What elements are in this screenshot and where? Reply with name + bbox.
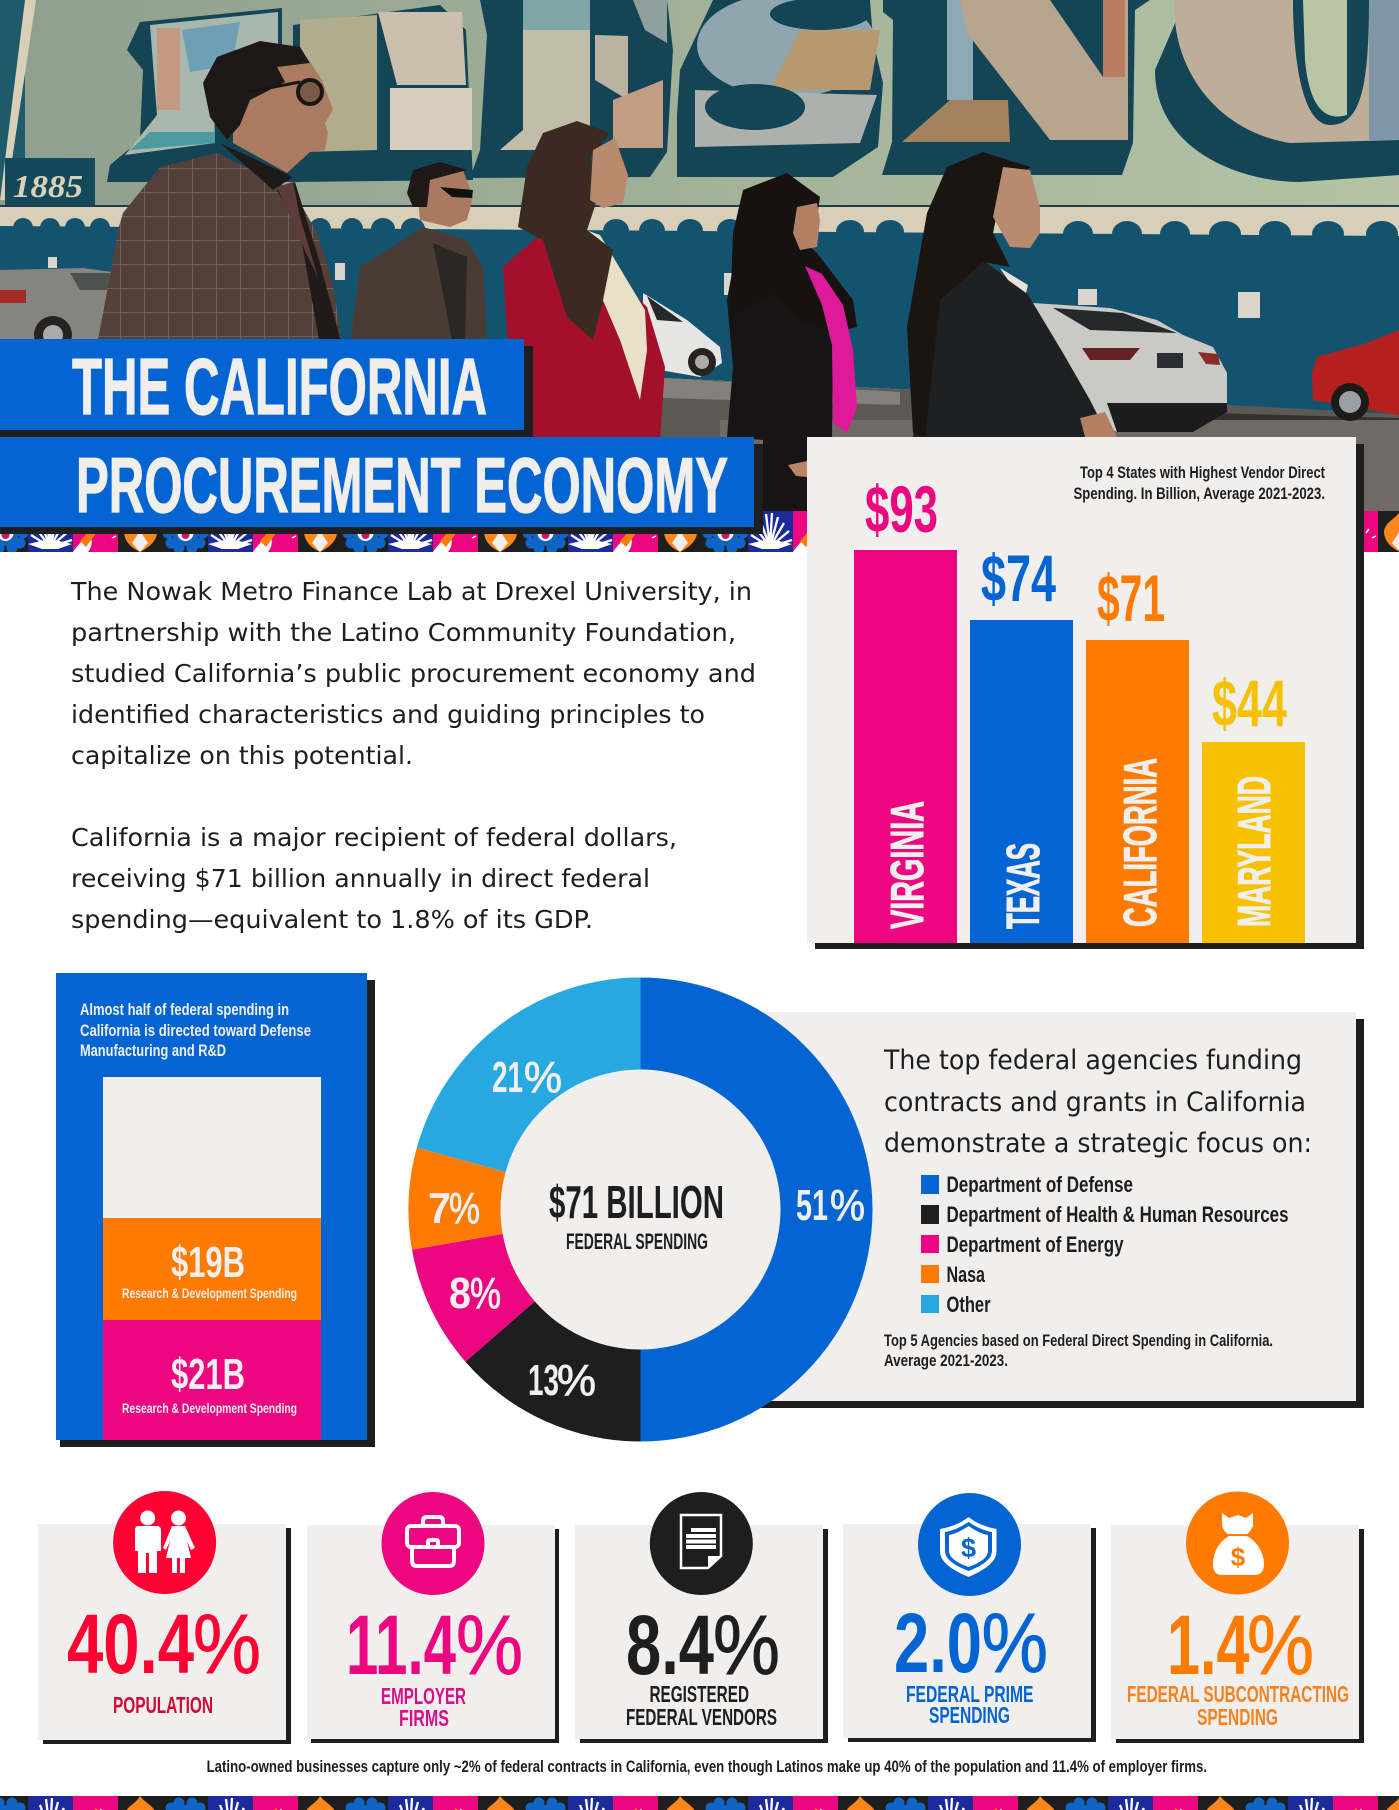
bar: California: CALIFORNIA xyxy=(1114,758,1166,927)
panel: defense and R&D spending xyxy=(56,973,375,1447)
chart caption: Spending. In Billion, Average 2021-2023. xyxy=(1074,485,1325,503)
stat card: federal prime spending: FEDERAL PRIME xyxy=(906,1681,1034,1707)
intro text block: studied California’s public procurement economy and xyxy=(71,659,756,688)
icon: document xyxy=(681,1515,721,1568)
chart caption xyxy=(1074,464,1325,503)
bar: Maryland xyxy=(1202,666,1305,943)
woman with curly hair and pink scarf xyxy=(727,173,857,511)
agencies footnote xyxy=(884,1332,1273,1370)
bar: Texas: TEXAS xyxy=(997,843,1049,929)
donut chart: % xyxy=(524,1053,562,1102)
agencies text: demonstrate a strategic focus on: xyxy=(884,1128,1312,1159)
stat card: registered federal vendors: FEDERAL VENDORS xyxy=(626,1704,777,1730)
stat card: employer firms xyxy=(307,1492,559,1743)
icon: shield with dollar: $ xyxy=(961,1533,976,1563)
donut chart: % xyxy=(470,1269,501,1318)
stat card: federal prime spending: SPENDING xyxy=(929,1702,1010,1728)
stat card: federal subcontracting spending xyxy=(1111,1492,1364,1743)
panel intro text xyxy=(80,1001,311,1060)
legend: Department of Energy xyxy=(946,1232,1124,1257)
stat card: registered federal vendors: REGISTERED xyxy=(650,1681,749,1707)
intro text block: identified characteristics and guiding principles to xyxy=(71,700,705,729)
stat card: population: POPULATION xyxy=(113,1692,213,1718)
bottom decorative strip xyxy=(0,1796,1399,1810)
donut chart: % xyxy=(557,1356,596,1405)
title xyxy=(0,339,763,534)
agencies footnote: Average 2021-2023. xyxy=(884,1352,1008,1370)
stat card: federal subcontracting spending: % xyxy=(1247,1598,1314,1692)
panel intro text: California is directed toward Defense xyxy=(80,1022,311,1040)
intro text block: receiving $71 billion annually in direct federal xyxy=(71,864,650,893)
donut chart: % xyxy=(449,1184,480,1233)
donut chart: 13 xyxy=(528,1356,559,1405)
stacked bar: Research & Development Spending xyxy=(122,1401,297,1416)
stacked bar xyxy=(103,1077,321,1440)
agencies text xyxy=(883,1045,1312,1159)
panel: top 4 states bar chart xyxy=(807,437,1364,949)
icon: man and woman xyxy=(135,1510,195,1573)
stat card: federal prime spending: % xyxy=(982,1596,1048,1690)
chart caption: Top 4 States with Highest Vendor Direct xyxy=(1080,464,1325,482)
agencies text: contracts and grants in California xyxy=(884,1087,1306,1118)
donut chart: 21 xyxy=(492,1053,523,1102)
parked cars xyxy=(0,268,1399,432)
stat card: employer firms: % xyxy=(456,1598,523,1692)
bar: Maryland: $44 xyxy=(1212,666,1287,740)
legend: Other xyxy=(946,1292,991,1317)
stat card: population: % xyxy=(193,1597,261,1691)
bar: Maryland: MARYLAND xyxy=(1228,776,1280,927)
bar: Texas xyxy=(970,541,1073,943)
man in plaid jacket with glasses xyxy=(97,41,342,345)
bar: Virginia: $93 xyxy=(865,472,938,546)
stat card: federal subcontracting spending: 1.4 xyxy=(1167,1598,1250,1692)
donut chart xyxy=(408,978,872,1442)
man in brown jacket with sunglasses xyxy=(350,162,487,345)
intro text block: capitalize on this potential. xyxy=(71,741,413,770)
stat card: federal prime spending: 2.0 xyxy=(894,1596,982,1690)
donut chart: $71 BILLION xyxy=(549,1176,724,1228)
stat card: registered federal vendors: % xyxy=(713,1598,780,1692)
legend: Department of Defense xyxy=(946,1172,1133,1197)
stat card: employer firms: FIRMS xyxy=(399,1705,449,1731)
panel: top federal agencies xyxy=(700,1012,1364,1408)
stat card: registered federal vendors: 8.4 xyxy=(626,1598,714,1692)
donut chart: 7 xyxy=(428,1184,451,1233)
stat card: registered federal vendors xyxy=(575,1492,828,1743)
intro text block: California is a major recipient of federal dollars, xyxy=(71,823,677,852)
stacked bar: $19B xyxy=(171,1238,245,1287)
donut chart: % xyxy=(830,1181,865,1230)
donut chart: 8 xyxy=(449,1269,471,1318)
bar: Virginia: VIRGINIA xyxy=(881,801,933,929)
legend xyxy=(921,1172,1288,1317)
stat card: federal prime spending xyxy=(843,1493,1096,1742)
agencies footnote: Top 5 Agencies based on Federal Direct Spending in California. xyxy=(884,1332,1273,1350)
bar: California xyxy=(1086,561,1189,943)
stacked bar: $21B xyxy=(171,1350,245,1399)
intro text block: spending—equivalent to 1.8% of its GDP. xyxy=(71,905,593,934)
legend: Nasa xyxy=(946,1262,986,1287)
icon: shield with dollar xyxy=(940,1517,996,1577)
icon: briefcase xyxy=(407,1517,459,1566)
donut chart: FEDERAL SPENDING xyxy=(566,1229,708,1254)
icon: money bag xyxy=(1213,1513,1264,1575)
intro text block: The Nowak Metro Finance Lab at Drexel University, in xyxy=(70,577,752,606)
stat card: population: 40.4 xyxy=(67,1597,194,1691)
title: PROCUREMENT ECONOMY xyxy=(76,441,728,529)
bar: California: $71 xyxy=(1097,561,1165,635)
stat card: employer firms: 11.4 xyxy=(346,1598,456,1692)
stat card: federal subcontracting spending: SPENDING xyxy=(1197,1704,1278,1730)
bar: Virginia xyxy=(854,472,957,943)
intro text block: partnership with the Latino Community Foundation, xyxy=(71,618,736,647)
decorative folk-pattern strip under the hero xyxy=(0,511,1399,552)
hero photo: group of five people in front of the Fresno mural xyxy=(0,0,1399,511)
stat card: population xyxy=(38,1491,291,1744)
donut chart: 51 xyxy=(796,1181,828,1230)
intro text block xyxy=(70,577,756,934)
agencies text: The top federal agencies funding xyxy=(883,1045,1302,1076)
bar: Texas: $74 xyxy=(981,541,1056,615)
icon: money bag: $ xyxy=(1231,1542,1246,1572)
woman in red jacket xyxy=(503,121,665,440)
title: THE CALIFORNIA xyxy=(72,342,487,431)
hero photo: group of five people in front of the Fresno mural: 1885 xyxy=(13,168,83,204)
stat card: employer firms: EMPLOYER xyxy=(381,1683,466,1709)
panel intro text: Almost half of federal spending in xyxy=(80,1001,289,1019)
legend: Department of Health & Human Resources xyxy=(946,1202,1288,1227)
stacked bar: Research & Development Spending xyxy=(122,1286,297,1301)
panel intro text: Manufacturing and R&D xyxy=(80,1042,226,1060)
woman in black blazer xyxy=(907,152,1117,440)
